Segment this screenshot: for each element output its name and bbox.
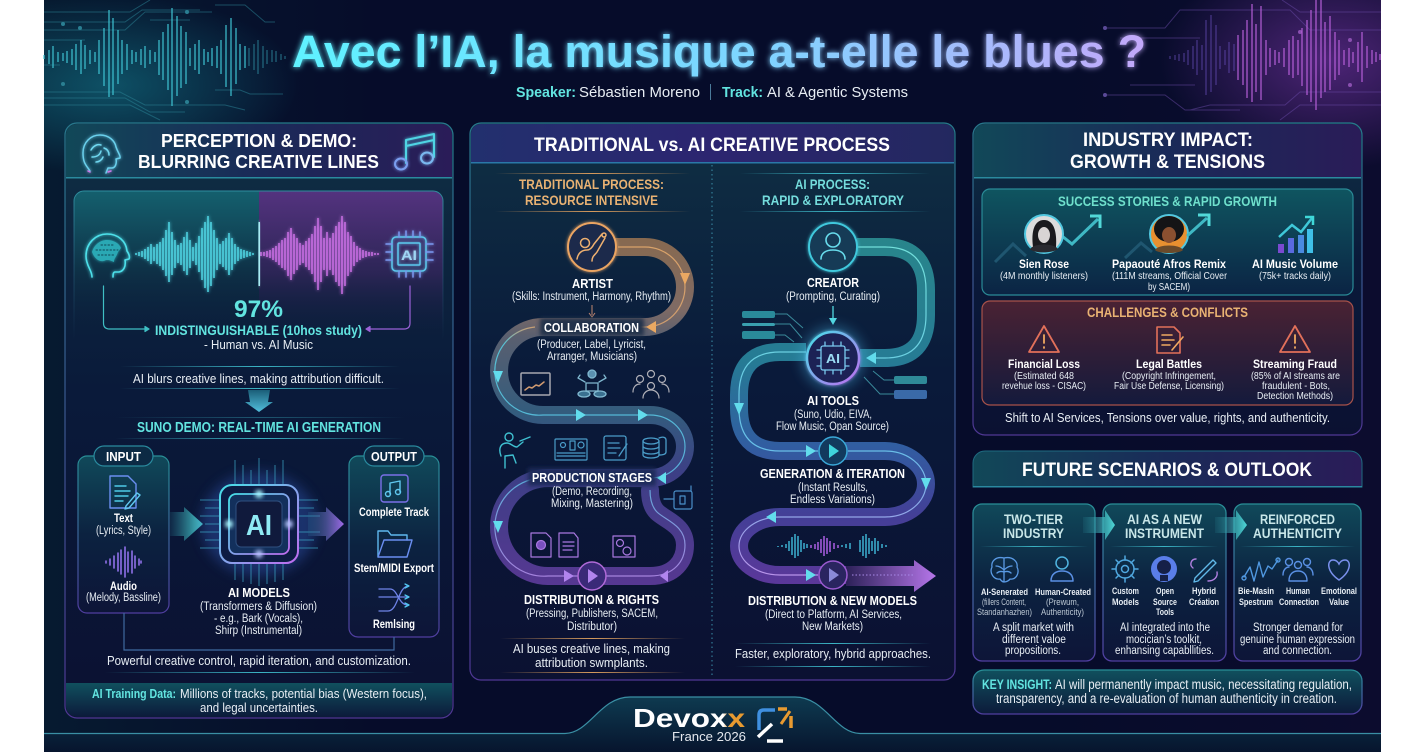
text: Papaouté [1112,257,1228,293]
logo text [633,703,746,744]
icon: AI music volume chart [1278,217,1313,253]
icon: brain head [83,135,120,173]
text: production stages [528,468,656,510]
arrow: artist to collaboration [589,305,595,317]
text: Papaouté: by SACEM) [1148,282,1190,293]
footer: Devoxx logo band [44,697,1381,752]
text: open source tools: Source [1153,597,1177,607]
icon: AI models chip [200,458,320,586]
icon: score screen [521,373,550,395]
icon: AI chip [386,231,433,277]
arrow: input to models [170,507,203,541]
text: creator [786,276,880,303]
text: bio-masin spectrum: Spestrum [1239,597,1273,607]
text: streaming fraud: Streaming Fraud [1253,357,1337,371]
text: generation [760,467,905,506]
text: human-created: Authenticity) [1041,607,1084,617]
icon: disc sleeve [613,536,635,557]
text: hybrid creation [1189,586,1219,607]
header wave: right [1103,0,1381,120]
arrow: ribbon head [846,560,936,592]
heading: traditional [519,176,664,208]
flow ribbon: traditional [493,247,690,582]
arrow: down to demo [245,390,273,412]
heading: traditional: TRADITIONAL PROCESS: [519,176,664,192]
card: challenges [982,301,1353,405]
panel header: GROWTH & TENSIONS [1070,152,1265,173]
icon: creator [809,223,857,271]
text: AI models: (Transformers & Diffusion) [200,601,317,613]
text: artist: ARTIST [572,277,613,291]
text: AI tools [776,394,889,433]
text: Papaouté: Papaouté Afros Remix [1112,257,1226,271]
text: remixing: Remlsing [373,619,415,631]
stat: 97 percent: INDISTINGUISHABLE (10hos study) [155,323,362,338]
icon: generation play button [819,437,847,465]
text: split market: A split market with [993,622,1074,634]
text: attribution: AI blurs creative lines, making attribution difficult. [133,371,384,386]
icon: distribution play button [819,561,847,589]
card: reinforced authenticity [1234,504,1361,661]
text: audio input: (Melody, Bassline) [86,592,161,604]
icon: human head with brain [86,234,129,277]
text: AI models: - e.g., Bark (Vocals), [214,613,303,625]
text: streaming fraud: (85% of AI streams are [1251,371,1340,382]
icon: person [1051,557,1073,581]
icon: clipboard [604,436,627,460]
icon: play button [578,562,606,590]
text: AI models: AI MODELS [228,586,290,600]
text: split market: propositions. [1005,645,1061,657]
text: AI integrated: mocician’s toolkit, [1126,634,1202,646]
icon: open source [1151,556,1177,582]
pill: output: OUTPUT [371,449,417,464]
icon: warning fraud [1280,326,1310,352]
icon: brain [991,558,1018,582]
text: open source tools: Open [1156,586,1174,596]
card: two-tier industry [973,504,1095,661]
growth arrow 2 [1125,215,1209,258]
text: legal battles: Fair Use Defense, Licensing) [1114,381,1224,392]
text: open source tools [1153,586,1177,617]
text: AI-generated: AI-Senerated [981,587,1028,597]
card: two-tier industry: TWO-TIER [1004,512,1063,527]
heading: AI process [762,176,905,208]
text: split market [993,622,1074,657]
column: traditional process [493,173,692,673]
icon: music note [395,134,434,170]
text: traditional takeaway [513,641,670,670]
text: generation: (Instant Results, [798,482,868,494]
text: collaboration: Arranger, Musicians) [547,351,637,363]
icon: vinyl document [531,533,551,557]
connector lines [124,613,394,650]
footer band: training data: Millions of tracks, potential bias (Western focus), [180,686,427,701]
text: bio-masin spectrum [1238,586,1274,607]
text: production stages: (Demo, Recording, [552,486,632,498]
text: production stages: PRODUCTION STAGES [532,471,652,485]
callout: key insight: AI will permanently impact music, necessitating regulation, [1055,677,1352,692]
text: distribution and rights [524,593,659,633]
icon: heart [1329,560,1349,580]
card: AI as a new instrument [1103,504,1226,661]
icon: audio wave [106,547,141,577]
icon: performer [500,433,530,468]
icon: AI models chip: AI [246,510,272,542]
card: AI as a new instrument: INSTRUMENT [1125,526,1205,541]
text: generation: GENERATION & ITERATION [760,467,905,481]
arrow: scenario 1 to 2 [1083,510,1115,540]
avatar: Papaouté [1150,215,1188,253]
icon: people connection [1283,558,1313,581]
text: powerful creative control: Powerful creative control, rapid iteration, and customization. [107,653,411,668]
logo mark [758,709,791,741]
icon: gear [1112,556,1138,582]
tool bars left [742,311,803,342]
text: financial loss [1002,357,1086,392]
icon: spectrum [1242,558,1280,581]
text: distribution new models [748,594,917,633]
text: custom models [1112,586,1139,607]
waveform: AI [261,216,378,294]
arrow: human to stat [104,286,149,332]
icon: AI chip: AI [401,247,417,263]
tool bars right [864,371,927,399]
text: custom models: Custom [1112,586,1139,596]
text: text input: Text [114,513,133,525]
text: open source tools: Tools [1156,607,1174,617]
icon: legal document [1157,327,1183,353]
text: streaming fraud: Detection Methods) [1257,391,1333,402]
arrow: models to output [308,507,344,541]
text: AI music volume [1252,257,1338,282]
callout: key insight: transparency, and a re-evaluation of human authenticity in creation. [996,691,1337,706]
panel: traditional vs AI process [470,123,955,680]
text: human-created [1035,587,1091,617]
perception comparison box [74,191,443,352]
subtitle: speaker and track [516,84,908,101]
text: AI-generated [977,587,1032,617]
text: financial loss: Financial Loss [1008,357,1080,371]
title: Avec l’IA, la musique a-t-elle le blues ? [292,26,1146,77]
arrow: AI to stat [366,286,410,332]
text: production stages: Mixing, Mastering) [551,498,633,510]
icon: music track [381,475,408,502]
text: stronger demand [1240,622,1355,657]
panel header [66,124,452,178]
icon: mixing desk [555,439,587,460]
text: shift: Shift to AI Services, Tensions over value, rights, and authenticity. [1005,410,1330,425]
text: traditional takeaway: AI buses creative lines, making [513,641,670,656]
text: distribution and rights: DISTRIBUTION & RIGHTS [524,593,659,607]
text: distribution and rights: (Pressing, Publishers, SACEM, [526,608,658,620]
text: emotional value [1321,586,1357,607]
text: AI models [200,586,317,637]
text: stronger demand: and connection. [1263,645,1332,657]
icon: text document [110,476,140,509]
text: Papaouté: (111M streams, Official Cover [1112,271,1228,282]
heading: AI process: RAPID & EXPLORATORY [762,192,905,208]
waveform: human [136,216,253,292]
heading: success: SUCCESS STORIES & RAPID GROWTH [1058,193,1277,209]
input box [78,446,169,613]
text: human connection [1279,586,1319,607]
callout: key insight [973,670,1362,714]
text: emotional value: Emotional [1321,586,1357,596]
text: hybrid creation: Hybrid [1192,586,1216,596]
text: complete track: Complete Track [359,507,429,519]
heading: AI process: AI PROCESS: [795,176,870,192]
callout: key insight: KEY INSIGHT: [982,677,1052,692]
text: artist: (Skills: Instrument, Harmony, Rhythm) [512,291,671,303]
text: stronger demand: genuine human expression [1240,634,1355,646]
panel: industry impact [973,123,1362,435]
panel header: PERCEPTION & DEMO: [161,130,357,151]
heading: suno demo: SUNO DEMO: REAL-TIME AI GENERATION [137,420,381,436]
output box [349,446,439,637]
text: AI music volume: (75k+ tracks daily) [1259,271,1331,282]
subtitle: speaker and track: Sébastien Moreno [579,84,700,101]
text: AI takeaway: Faster, exploratory, hybrid approaches. [735,646,931,661]
pill: input: INPUT [106,449,141,464]
stat: 97 percent: - Human vs. AI Music [204,338,313,352]
pill: input [94,446,153,466]
subtitle: speaker and track: Track: [722,84,763,101]
growth arrow 1 [995,216,1100,262]
icon: group of people [633,370,669,398]
text: stronger demand: Stronger demand for [1253,622,1343,634]
text: creator: (Prompting, Curating) [786,291,880,303]
text: audio input: Audio [110,581,137,593]
text: text input: (Lyrics, Style) [96,525,151,537]
icon: hybrid pencil [1191,559,1217,582]
text: AI music volume: AI Music Volume [1252,257,1338,271]
text: financial loss: revehue loss - CISAC) [1002,381,1086,392]
text: collaboration: (Producer, Label, Lyricist, [537,339,646,351]
text: text input [96,513,151,537]
text: distribution new models: (Direct to Platform, AI Services, [765,609,902,621]
footer band: training data [66,683,452,717]
icon: artist circle [568,223,616,271]
card: reinforced authenticity: REINFORCED [1260,512,1335,527]
text: Sien Rose: (4M monthly listeners) [1000,271,1088,282]
text: distribution new models: New Markets) [802,621,863,633]
text: AI integrated [1115,622,1214,657]
column: AI process [734,173,936,667]
stat: 97 percent [155,296,362,352]
text: streaming fraud: fraudulent - Bots, [1262,381,1330,392]
text: collaboration: COLLABORATION [544,321,639,335]
subtitle: speaker and track: Speaker: [516,84,576,101]
text: human-created: (Prewum, [1046,597,1079,607]
text: streaming fraud [1251,357,1340,402]
text: AI models: Shirp (Instrumental) [215,625,302,637]
icon: AI tools hub: AI [826,351,840,366]
icon: folder [378,531,412,557]
icon: device [664,486,692,509]
text: legal battles [1114,357,1224,392]
panel header [471,124,954,164]
flow ribbon: AI [734,247,931,581]
header wave: left [44,0,285,120]
icon: musician console [578,370,606,397]
card: reinforced authenticity: AUTHENTICITY [1253,526,1342,541]
text: generation: Endless Variations) [790,494,875,506]
text: Sien Rose: Sien Rose [1019,257,1069,271]
icon: warning financial [1029,326,1059,352]
avatar: Sien Rose [1025,215,1063,253]
text: AI integrated: enhansing capabllities. [1115,645,1214,657]
pill: output [364,446,424,466]
footer band: training data: and legal uncertainties. [200,700,318,715]
icon: database [643,437,666,458]
heading: future scenarios: FUTURE SCENARIOS & OUTLOOK [1022,460,1312,481]
card: success stories [982,189,1353,295]
arrow: scenario 2 to 3 [1215,510,1247,540]
text: Sien Rose [1000,257,1088,282]
text: AI-generated: Standanhazhen) [977,607,1032,617]
icon: contract document [559,533,578,557]
logo text: France 2026 [672,730,746,744]
text: human connection: Human [1286,586,1310,596]
stat: 97 percent: 97% [234,296,283,323]
text: traditional takeaway: attribution swmplants. [535,655,648,670]
text: financial loss: (Estimated 648 [1014,371,1074,382]
text: emotional value: Value [1329,597,1349,607]
text: distribution new models: DISTRIBUTION & NEW MODELS [748,594,917,608]
footer band: training data: AI Training Data: [92,686,176,701]
icon: remix arrows [379,584,409,611]
text: legal battles: (Copyright Infringement, [1122,371,1216,382]
text: AI tools: Flow Music, Opan Source) [776,421,889,433]
text: custom models: Models [1112,597,1139,607]
text: stem export: Stem/MIDI Export [354,563,434,575]
heading: future scenarios [973,451,1362,488]
panel header: TRADITIONAL vs. AI CREATIVE PROCESS [534,135,890,156]
text: human connection: Connection [1279,597,1319,607]
text: split market: different valoe [1002,634,1066,646]
card: two-tier industry: INDUSTRY [1003,526,1064,541]
text: human-created: Human-Created [1035,587,1091,597]
panel header: INDUSTRY IMPACT: [1083,130,1253,151]
text: audio input [86,581,161,604]
text: legal battles: Legal Battles [1136,357,1202,371]
panel: perception and demo [65,123,453,718]
subtitle: speaker and track: AI & Agentic Systems [767,84,908,101]
waveform: generation output [778,534,886,558]
logo text: Devoxx [633,703,746,733]
text: AI tools: AI TOOLS [807,394,859,408]
text: creator: CREATOR [807,276,859,290]
panel header [974,124,1361,178]
text: AI tools: (Suno, Udio, EIVA, [794,409,872,421]
card: AI as a new instrument: AI AS A NEW [1127,512,1202,527]
arrow: creator to tools [829,306,837,325]
text: AI integrated: AI integrated into the [1120,622,1210,634]
icon: AI tools hub [801,326,865,390]
panel header: BLURRING CREATIVE LINES [138,151,379,172]
heading: challenges: CHALLENGES & CONFLICTS [1087,304,1248,320]
text: bio-masin spectrum: Bie-Masin [1238,586,1274,596]
text: AI-generated: (fillers Content, [982,597,1026,607]
text: artist [512,277,671,303]
text: distribution and rights: Distributor) [567,621,617,633]
text: hybrid creation: Création [1189,597,1219,607]
text: collaboration [537,318,646,363]
heading: traditional: RESOURCE INTENSIVE [525,192,658,208]
